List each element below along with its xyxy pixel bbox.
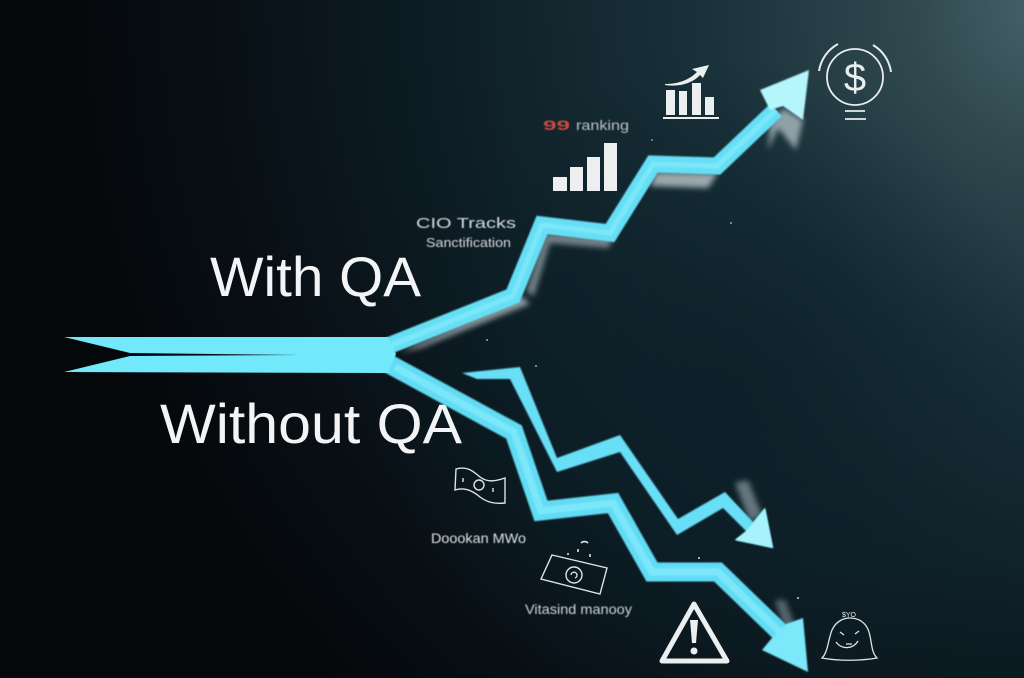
icon: bar chart with upward arrow	[663, 65, 719, 119]
icon: dollar circle: $	[844, 56, 866, 100]
icon: warning triangle	[662, 604, 727, 661]
text: Vitasind manooy: Vitasind manooy	[525, 601, 632, 617]
text: Doookan MWo: Doookan MWo	[431, 530, 526, 546]
arrow: Without QA upper falling path	[462, 367, 773, 548]
label: Without QA: Without QA	[160, 392, 463, 455]
icon: wavy banknote	[455, 468, 505, 503]
icon: banknote with coins	[541, 542, 607, 594]
particles	[486, 139, 799, 599]
icon: dollar circle	[819, 44, 891, 119]
label: With QA: With QA	[210, 245, 422, 308]
arrow: With QA rising path	[378, 70, 809, 352]
stat: 99 ranking: ranking	[576, 117, 629, 133]
icon: money bag face: $YO	[842, 612, 857, 619]
icon: money bag face	[822, 612, 877, 660]
text: CIO Tracks	[416, 215, 516, 250]
text: CIO Tracks: Sanctification	[426, 235, 511, 250]
stat: 99 ranking: 99	[543, 117, 570, 133]
stat: 99 ranking	[543, 117, 629, 133]
text: CIO Tracks: CIO Tracks	[416, 215, 516, 232]
icon: rising bars	[553, 143, 617, 191]
arrow: Without QA lower falling path	[378, 358, 808, 672]
arrow: shared horizontal stem	[64, 337, 396, 373]
